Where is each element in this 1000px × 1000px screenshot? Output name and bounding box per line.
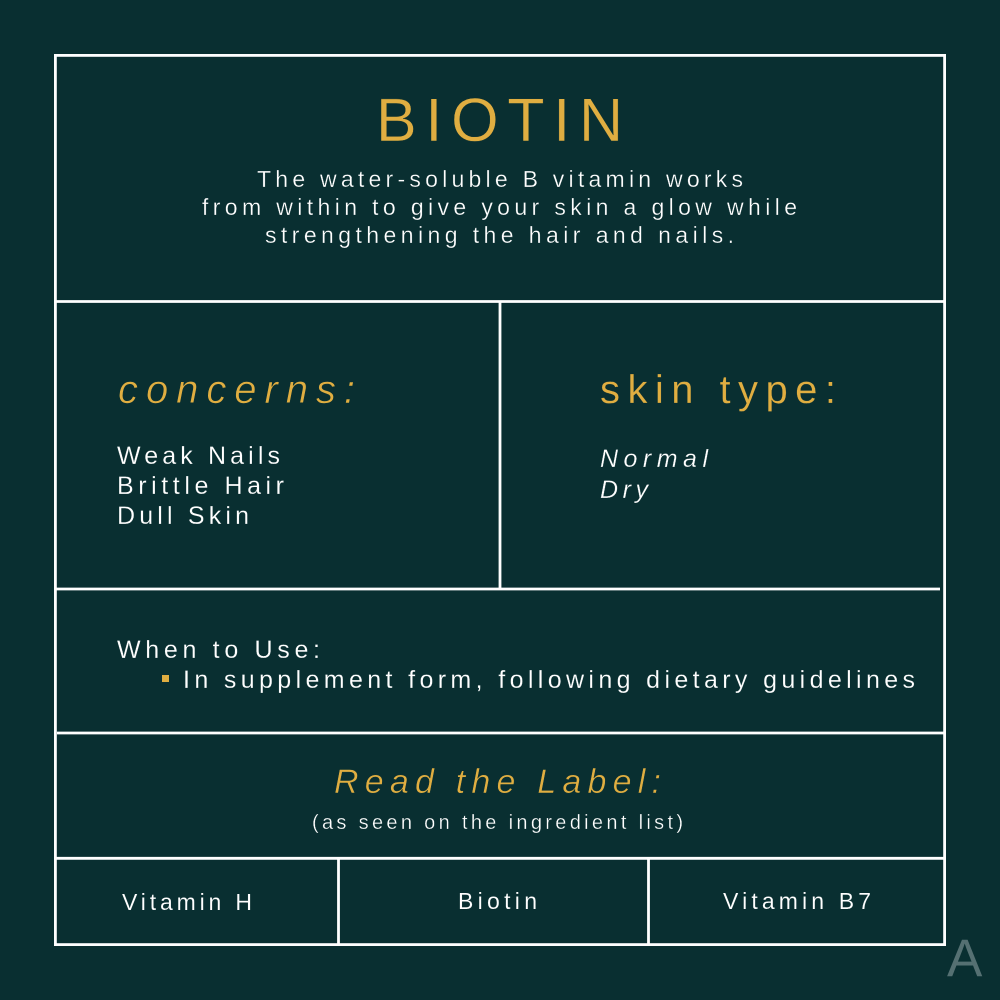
ingredient names: Vitamin H: [122, 889, 252, 915]
panel: when to use: [117, 636, 915, 694]
read the label note: (as seen on the ingredient list): [312, 812, 683, 834]
bullet: [162, 675, 169, 682]
ingredient names: Vitamin B7: [723, 888, 871, 914]
intro text: [202, 166, 797, 248]
ingredient names: Biotin: [458, 888, 537, 914]
frame: outer border and cell dividers: [55, 55, 945, 945]
concerns list: Dull Skin: [117, 502, 249, 530]
panel: concerns: [117, 368, 355, 530]
skin type heading: skin type:: [600, 368, 836, 412]
panel: skin type: [600, 368, 836, 504]
intro text: The water-soluble B vitamin works: [257, 166, 743, 192]
when to use text: In supplement form, following dietary guidelines: [183, 666, 915, 694]
panel: read the label: [312, 763, 683, 834]
skin type list: Dry: [600, 476, 650, 504]
ingredient names: [122, 888, 871, 915]
intro text: from within to give your skin a glow while: [202, 194, 797, 220]
watermark logo: A: [947, 929, 983, 988]
when to use heading: When to Use:: [117, 636, 320, 664]
concerns heading: concerns:: [118, 368, 355, 412]
concerns list: Brittle Hair: [117, 472, 284, 500]
intro text: strengthening the hair and nails.: [265, 222, 734, 248]
skin type list: Normal: [600, 445, 709, 473]
title: BIOTIN: [376, 86, 623, 154]
concerns list: [117, 442, 284, 530]
read the label heading: Read the Label:: [334, 763, 661, 801]
skin type list: [600, 445, 709, 504]
concerns list: Weak Nails: [117, 442, 280, 470]
